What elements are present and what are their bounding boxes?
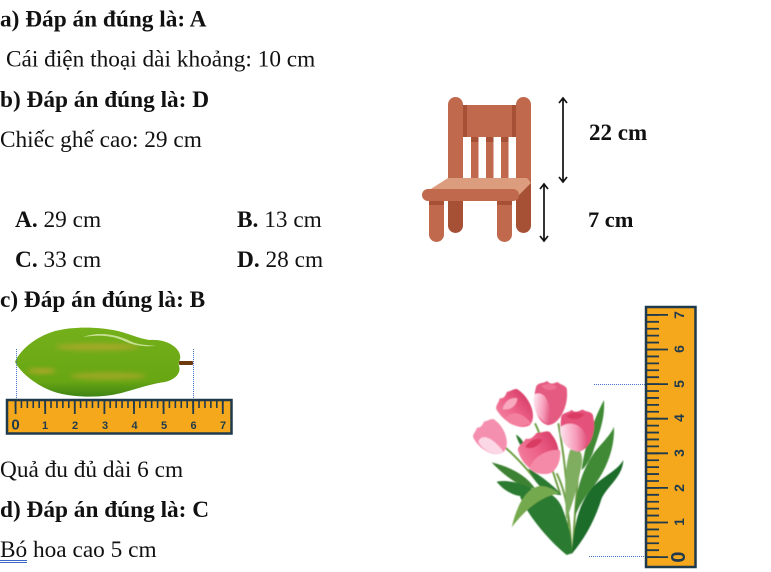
spelling underline <box>0 560 27 562</box>
answer a text: Cái điện thoại dài khoảng: 10 cm <box>6 46 315 72</box>
answer d heading: d) Đáp án đúng là: C <box>0 497 209 523</box>
label: 22 cm: 22 cm <box>589 120 647 145</box>
horizontal ruler: 3 <box>102 420 108 432</box>
flower left <box>469 415 515 462</box>
flower guide lines <box>589 384 645 556</box>
answer c heading: c) Đáp án đúng là: B <box>0 287 205 313</box>
stems <box>505 423 579 553</box>
label: 7 cm: 7 cm <box>588 207 634 232</box>
vertical ruler: 0 <box>668 551 690 563</box>
icon: papaya <box>15 328 193 397</box>
horizontal ruler: 5 <box>161 420 167 432</box>
answer b text: Chiếc ghế cao: 29 cm <box>0 127 202 153</box>
horizontal ruler: 6 <box>190 420 197 432</box>
horizontal ruler: 0 <box>11 416 20 434</box>
horizontal ruler: 4 <box>131 420 138 432</box>
option C: C. 33 cm <box>15 247 101 273</box>
flower center <box>514 427 568 482</box>
vertical ruler: 1 <box>671 518 687 526</box>
flower top left <box>492 385 542 435</box>
option B: B. 13 cm <box>237 207 322 233</box>
vertical ruler: 4 <box>671 414 687 422</box>
icon: tulip bouquet <box>469 380 623 555</box>
horizontal ruler <box>7 400 232 434</box>
arrow: 7 cm <box>540 184 548 241</box>
vertical ruler: 7 <box>671 311 687 319</box>
icon: chair <box>422 97 531 242</box>
papaya guide lines <box>16 349 194 399</box>
answer b heading: b) Đáp án đúng là: D <box>0 87 209 113</box>
horizontal ruler: 1 <box>42 420 48 432</box>
vertical ruler: 2 <box>671 484 687 492</box>
leaves <box>520 491 572 555</box>
vertical ruler: 5 <box>671 380 687 388</box>
option D: D. 28 cm <box>237 247 323 273</box>
horizontal ruler: 2 <box>72 420 78 432</box>
option A: A. 29 cm <box>15 207 101 233</box>
answer a heading: a) Đáp án đúng là: A <box>0 6 207 32</box>
vertical ruler: 3 <box>671 449 687 457</box>
answer c text: Quả đu đủ dài 6 cm <box>0 457 183 483</box>
answer d text: Bó hoa cao 5 cm <box>0 537 157 563</box>
flower right <box>559 409 595 452</box>
horizontal ruler: 7 <box>220 420 226 432</box>
vertical ruler: 6 <box>671 345 687 353</box>
flower top middle <box>531 380 568 427</box>
vertical ruler <box>646 307 696 567</box>
arrow: 22 cm <box>559 98 567 182</box>
